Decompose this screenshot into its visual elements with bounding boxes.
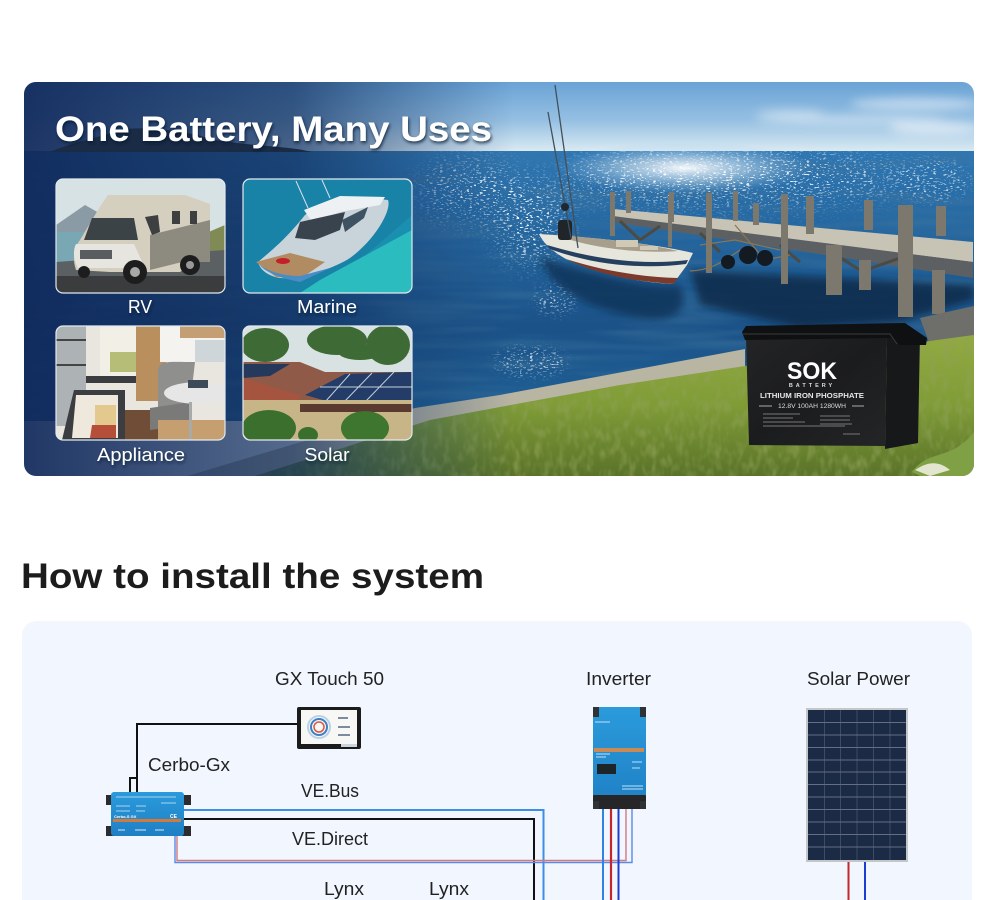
icon: solar panel (806, 708, 908, 862)
tile labels: Marine (297, 297, 357, 317)
diagram labels: Inverter (586, 669, 651, 689)
wire: blue sense (175, 808, 632, 862)
clouds (755, 98, 980, 135)
sea (24, 151, 974, 421)
tile labels (97, 297, 357, 465)
wire: solar red (848, 862, 850, 900)
wire: inverter light blue (602, 808, 604, 900)
pier (610, 191, 973, 317)
icon: Cerbo-GX unit: CE (170, 814, 178, 820)
sun glint (564, 151, 806, 192)
tile: RV (56, 179, 225, 293)
tile: Marine (243, 179, 412, 293)
wire: VE.Direct black (184, 819, 534, 900)
panel: hero photo banner (24, 82, 980, 480)
grass (255, 335, 974, 476)
diagram labels: Lynx (324, 879, 364, 899)
wire: red sense (177, 808, 626, 860)
tile labels: Solar (304, 445, 350, 465)
tile: Appliance (56, 326, 232, 440)
title: One Battery, Many Uses (55, 110, 492, 149)
diagram labels: Lynx (429, 879, 469, 899)
concrete shore (187, 349, 745, 476)
left navy overlay (24, 82, 514, 476)
diagram labels: Solar Power (807, 669, 910, 689)
icon: Cerbo-GX unit: Cerbo-S GX (114, 814, 137, 819)
panel background (22, 621, 972, 900)
tile: Solar (241, 325, 412, 446)
grass texture (288, 336, 974, 476)
icon: inverter (593, 707, 646, 809)
pier reflection (690, 270, 974, 328)
rocks on shoreline (920, 306, 974, 345)
diagram labels: Cerbo-Gx (148, 755, 230, 775)
icon: Cerbo-GX unit (106, 792, 191, 836)
heading: how to install: How to install the system (21, 557, 484, 596)
tile labels: Appliance (97, 445, 185, 465)
fishing boat (539, 85, 693, 284)
battery: BATTERY (789, 383, 835, 389)
wire: VE.Bus blue (184, 810, 544, 900)
tile labels: RV (128, 297, 152, 317)
icon: GX Touch display (297, 707, 361, 749)
boat reflection (540, 258, 684, 319)
diagram labels: VE.Direct (292, 829, 368, 849)
diagram labels: VE.Bus (301, 781, 359, 801)
tile borders (56, 179, 412, 440)
battery: 12.8V 100AH 1280WH (778, 403, 846, 410)
battery: LITHIUM IRON PHOSPHATE (760, 391, 864, 400)
panel: wiring diagram (22, 621, 972, 900)
glitter on water (408, 151, 974, 384)
battery (742, 323, 927, 449)
wire: solar blue (864, 862, 866, 900)
water ripples (406, 190, 974, 396)
wires (130, 724, 865, 900)
foreground leaves (912, 432, 974, 476)
sky (24, 82, 974, 152)
diagram labels (148, 669, 910, 899)
battery logo: SOK (787, 358, 838, 385)
wire: inverter dark blue (618, 808, 620, 900)
diagram labels: GX Touch 50 (275, 669, 384, 689)
wire: inverter red (610, 808, 612, 900)
island silhouette (50, 128, 312, 152)
wire: touch to cerbo (130, 724, 297, 792)
